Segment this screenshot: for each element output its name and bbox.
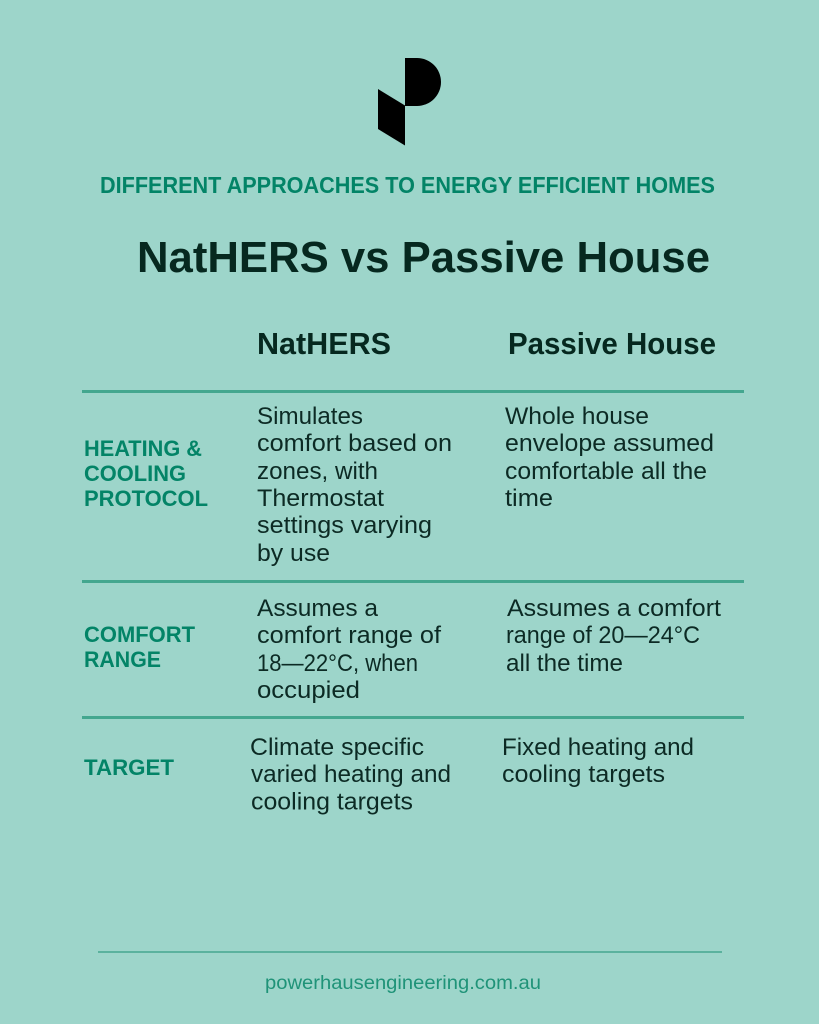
row label: comfort range: [84, 622, 195, 672]
NatHERS heating text: [257, 403, 452, 567]
NatHERS comfort text: occupied: [257, 677, 360, 704]
Passive House target text: cooling targets: [502, 761, 665, 788]
NatHERS heating text: by use: [257, 540, 330, 567]
NatHERS comfort text: Assumes a: [257, 595, 379, 622]
row label: comfort range: COMFORT: [84, 622, 195, 647]
NatHERS comfort text: [257, 595, 441, 704]
row divider: top: [82, 390, 744, 393]
title: NatHERS vs Passive House: [137, 234, 710, 282]
NatHERS heating text: comfort based on: [257, 430, 452, 457]
Passive House heating text: time: [505, 485, 553, 512]
Passive House heating text: envelope assumed: [505, 430, 714, 457]
row label: comfort range: RANGE: [84, 647, 161, 672]
footer website: powerhausengineering.com.au: [265, 972, 541, 994]
Passive House comfort text: range of 20—24°C: [506, 622, 700, 649]
NatHERS comfort text: 18—22°C, when: [257, 650, 418, 677]
row label: heating and cooling protocol: PROTOCOL: [84, 486, 208, 511]
row label: target: TARGET: [84, 755, 174, 780]
row divider: middle: [82, 580, 744, 583]
NatHERS target text: Climate specific: [250, 734, 424, 761]
column heading: Passive House: Passive House: [508, 327, 716, 361]
NatHERS heating text: zones, with: [257, 458, 378, 485]
row label: heating and cooling protocol: COOLING: [84, 461, 186, 486]
Passive House comfort text: Assumes a comfort: [507, 595, 721, 622]
Passive House target text: [502, 734, 694, 788]
row divider: bottom: [82, 716, 744, 719]
footer rule: [98, 951, 722, 953]
subtitle: DIFFERENT APPROACHES TO ENERGY EFFICIENT HOMES: [100, 172, 715, 198]
NatHERS heating text: settings varying: [257, 512, 432, 539]
NatHERS heating text: Simulates: [257, 403, 363, 430]
Passive House heating text: comfortable all the: [505, 458, 707, 485]
NatHERS heating text: Thermostat: [257, 485, 384, 512]
NatHERS comfort text: comfort range of: [257, 622, 441, 649]
NatHERS target text: [250, 734, 451, 816]
icon: logo: [378, 58, 441, 146]
Passive House heating text: [505, 403, 714, 512]
column heading: NatHERS: NatHERS: [257, 327, 391, 361]
NatHERS target text: varied heating and: [251, 761, 451, 788]
Passive House comfort text: all the time: [506, 650, 623, 677]
NatHERS target text: cooling targets: [251, 788, 413, 816]
Passive House heating text: Whole house: [505, 403, 649, 430]
row label: heating and cooling protocol: HEATING &: [84, 436, 202, 461]
row label: heating and cooling protocol: [84, 436, 208, 511]
Passive House target text: Fixed heating and: [502, 734, 694, 761]
Passive House comfort text: [506, 595, 721, 677]
